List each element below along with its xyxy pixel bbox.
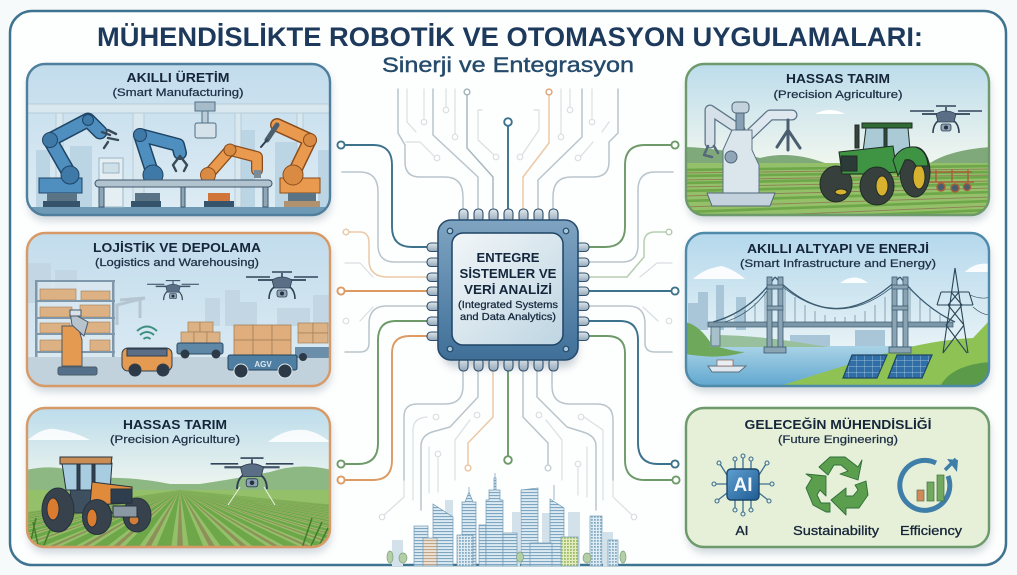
panel border	[27, 233, 330, 386]
panel: precision agriculture right	[685, 63, 991, 221]
dark blue traces	[337, 118, 679, 468]
light green trace	[588, 229, 672, 277]
agricultural robot	[704, 102, 800, 206]
chip body	[438, 220, 578, 360]
title: MÜHENDİSLİKTE ROBOTİK VE OTOMASYON UYGULAMALARI:	[97, 22, 923, 52]
AGV label: AGV	[254, 360, 272, 369]
electricity pylon	[937, 268, 990, 353]
heading: HASSAS TARIM	[786, 72, 890, 86]
drone	[910, 106, 982, 133]
icon label: Efficiency: Efficiency	[900, 524, 963, 538]
icon: AI chip: AI	[734, 475, 752, 496]
subheading: (Precision Agriculture)	[774, 89, 902, 101]
wifi icon	[137, 326, 157, 339]
icon label: AI: AI	[736, 524, 748, 538]
robot arm 2	[140, 135, 187, 175]
heading: AKILLI ÜRETİM	[126, 70, 230, 85]
right AGV with boxes	[295, 323, 330, 361]
shelving with boxes	[35, 280, 115, 357]
chip screw holes	[447, 228, 569, 352]
icon label: Sustainability: Sustainability	[793, 524, 880, 538]
ceiling camera	[195, 102, 216, 138]
chip text: ENTEGRE	[476, 250, 540, 265]
heading: LOJİSTİK VE DEPOLAMA	[93, 240, 261, 255]
heading: HASSAS TARIM	[123, 418, 227, 432]
warehouse scene	[26, 232, 332, 387]
bridge scene	[685, 232, 991, 387]
drone left	[147, 281, 199, 300]
crane	[117, 298, 145, 325]
circuit traces	[337, 89, 680, 520]
field scene	[28, 409, 329, 546]
faint top traces	[343, 89, 672, 520]
subheading: (Smart Infrastructure and Energy)	[740, 258, 936, 270]
heading: AKILLI ALTYAPI VE ENERJİ	[747, 241, 929, 256]
spray drone	[211, 458, 293, 489]
hills	[685, 322, 745, 357]
chip text: and Data Analytics)	[460, 311, 556, 323]
green traces	[337, 141, 680, 484]
drone right	[246, 272, 318, 299]
robot arm 4	[261, 125, 310, 175]
control panel	[99, 158, 123, 207]
panel: precision agriculture left	[24, 406, 334, 556]
small AGV with boxes	[177, 322, 223, 358]
boat	[708, 366, 746, 372]
chip screen	[452, 233, 563, 345]
panel border	[686, 233, 989, 386]
gray traces	[342, 89, 673, 510]
icon: recycle	[806, 457, 868, 515]
orange warehouse robot	[58, 310, 97, 375]
panel border	[27, 64, 330, 215]
conveyor	[95, 180, 272, 207]
chip pins	[427, 209, 589, 371]
green tractor	[820, 123, 930, 205]
bridge	[713, 277, 955, 325]
farm scene	[685, 63, 991, 220]
orange AGV	[122, 348, 172, 376]
subheading: (Future Engineering)	[778, 434, 898, 446]
robot arm 1	[50, 120, 118, 175]
city skyline	[387, 473, 626, 566]
grass tufts	[30, 518, 328, 548]
chip text: (Integrated Systems	[458, 299, 558, 311]
icon: efficiency	[900, 459, 958, 510]
plow attachment	[930, 170, 974, 192]
solar panels	[843, 355, 932, 378]
chip text: SİSTEMLER VE	[460, 266, 557, 281]
heading: GELECEĞİN MÜHENDİSLİĞİ	[744, 417, 932, 432]
central chip	[427, 209, 589, 371]
subtitle: Sinerji ve Entegrasyon	[382, 54, 634, 77]
orange tractor	[42, 457, 151, 534]
light orange traces	[343, 89, 552, 471]
panel: smart manufacturing	[26, 63, 332, 221]
panel border	[27, 408, 330, 547]
chip text	[458, 250, 558, 323]
subheading: (Precision Agriculture)	[110, 434, 240, 446]
subheading: (Smart Manufacturing)	[112, 87, 244, 99]
panel border	[686, 64, 989, 215]
subheading: (Logistics and Warehousing)	[95, 257, 259, 269]
factory scene	[26, 63, 332, 216]
orange traces	[337, 287, 428, 484]
panel background	[686, 408, 989, 547]
robot arm 3	[208, 150, 257, 175]
panel: smart infrastructure and energy	[685, 232, 991, 392]
panel: future engineering	[686, 408, 990, 553]
icon: AI chip	[712, 454, 774, 516]
chip text: VERİ ANALİZİ	[464, 282, 552, 297]
panel: logistics and warehousing	[26, 232, 332, 392]
large AGV with boxes	[228, 325, 297, 378]
